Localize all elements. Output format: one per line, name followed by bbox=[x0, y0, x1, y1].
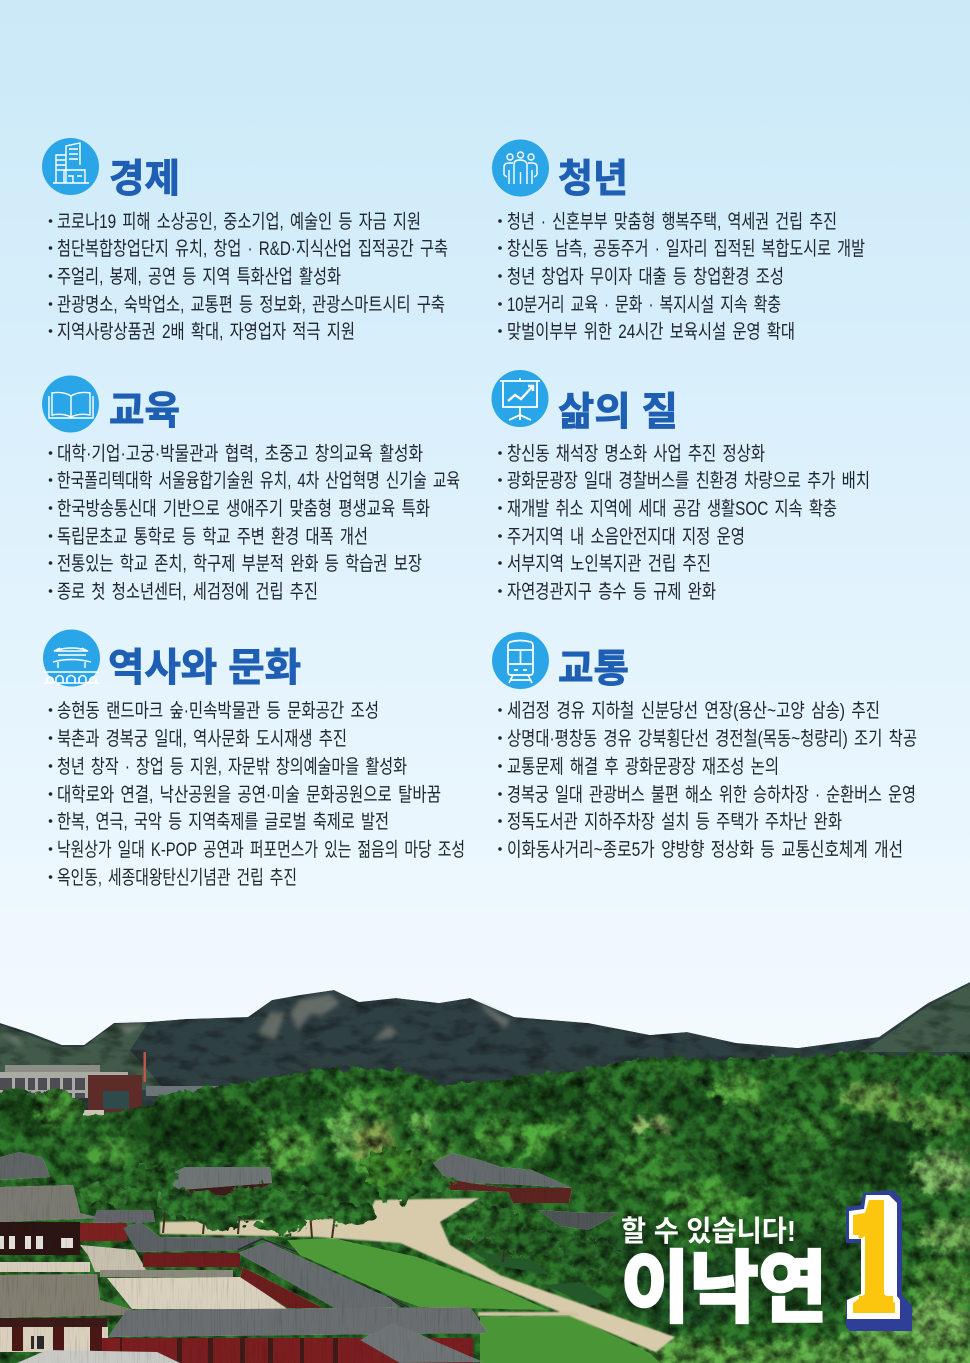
panel: 교육 bbox=[42, 376, 460, 603]
heading: 교육 bbox=[109, 390, 180, 433]
bullet list bbox=[49, 211, 448, 343]
candidate name: 이낙연 bbox=[621, 1244, 827, 1332]
lawn bbox=[287, 1238, 660, 1363]
bullet list: 청년 창작 · 창업 등 지원, 자문밖 창의예술마을 활성화 bbox=[57, 756, 407, 778]
bullet list: 10분거리 교육 · 문화 · 복지시설 지속 확충 bbox=[507, 294, 781, 316]
bullet list: 송현동 랜드마크 숲·민속박물관 등 문화공간 조성 bbox=[57, 700, 379, 722]
bullet list: 독립문초교 통학로 등 학교 주변 환경 대폭 개선 bbox=[57, 526, 368, 548]
bullet list bbox=[49, 700, 465, 889]
slogan: 할 수 있습니다! bbox=[621, 1215, 796, 1248]
front hall bbox=[0, 1327, 108, 1352]
bullet list: 대학로와 연결, 낙산공원을 공연·미술 문화공원으로 탈바꿈 bbox=[57, 784, 441, 806]
bullet list: 자연경관지구 층수 등 규제 완화 bbox=[507, 581, 716, 603]
palace buildings bbox=[0, 1152, 619, 1363]
bullet list: 창신동 채석장 명소화 사업 추진 정상화 bbox=[507, 443, 765, 465]
icon: city buildings bbox=[42, 138, 99, 195]
mountains bbox=[0, 982, 970, 1110]
bullet list: 재개발 취소 지역에 세대 공감 생활SOC 지속 확충 bbox=[507, 498, 837, 520]
bullet list: 광화문광장 일대 경찰버스를 친환경 차량으로 추가 배치 bbox=[507, 470, 870, 492]
bullet list: 지역사랑상품권 2배 확대, 자영업자 적극 지원 bbox=[57, 321, 355, 343]
bullet list: 교통문제 해결 후 광화문광장 재조성 논의 bbox=[507, 756, 779, 778]
terrace bbox=[80, 1245, 147, 1272]
bullet list: 한복, 연극, 국악 등 지역축제를 글로벌 축제로 발전 bbox=[57, 811, 389, 833]
heading: 역사와 문화 bbox=[108, 647, 301, 690]
icon: people bbox=[492, 140, 549, 196]
bullet list: 북촌과 경복궁 일대, 역사문화 도시재생 추진 bbox=[57, 728, 347, 750]
bullet list: 첨단복합창업단지 유치, 창업 · R&D·지식산업 집적공간 구축 bbox=[57, 238, 448, 260]
bullet list: 한국폴리텍대학 서울융합기술원 유치, 4차 산업혁명 신기술 교육 bbox=[57, 470, 460, 492]
bullet list: 한국방송통신대 기반으로 생애주기 맞춤형 평생교육 특화 bbox=[57, 498, 430, 520]
panel: 교통 bbox=[492, 632, 917, 861]
bullet list: 정독도서관 지하주차장 설치 등 주택가 주차난 완화 bbox=[507, 811, 842, 833]
heading: 경제 bbox=[109, 158, 180, 201]
bullet list: 주얼리, 봉제, 공연 등 지역 특화산업 활성화 bbox=[57, 266, 341, 288]
bullet list: 옥인동, 세종대왕탄신기념관 건립 추진 bbox=[57, 867, 297, 889]
icon: open book bbox=[42, 376, 99, 432]
bullet list: 맞벌이부부 위한 24시간 보육시설 운영 확대 bbox=[507, 321, 795, 343]
badge: number 1 bbox=[846, 1173, 912, 1363]
bullet list: 대학·기업·고궁·박물관과 협력, 초중고 창의교육 활성화 bbox=[57, 443, 423, 465]
bullet list: 코로나19 피해 소상공인, 중소기업, 예술인 등 자금 지원 bbox=[57, 211, 421, 233]
bullet list bbox=[49, 443, 460, 603]
sand paths bbox=[160, 1198, 675, 1352]
bullet list: 청년 창업자 무이자 대출 등 창업환경 조성 bbox=[507, 266, 784, 288]
badge: number 1: 1 bbox=[854, 1173, 896, 1363]
icon: train bbox=[492, 632, 549, 689]
bullet list: 세검정 경유 지하철 신분당선 연장(용산~고양 삼송) 추진 bbox=[507, 700, 880, 722]
bullet list: 종로 첫 청소년센터, 세검정에 건립 추진 bbox=[57, 581, 318, 603]
bullet list bbox=[498, 700, 917, 861]
bullet list: 낙원상가 일대 K-POP 공연과 퍼포먼스가 있는 젊음의 마당 조성 bbox=[57, 839, 465, 861]
bullet list bbox=[498, 443, 870, 603]
mountain rock faces bbox=[0, 994, 510, 1050]
icon: palace gate bbox=[43, 630, 100, 686]
icon: presentation board bbox=[492, 370, 548, 427]
main hall bbox=[0, 1222, 80, 1255]
panel: 경제 bbox=[42, 138, 448, 343]
background city building bbox=[0, 1052, 236, 1120]
bullet list: 청년 · 신혼부부 맞춤형 행복주택, 역세권 건립 추진 bbox=[507, 211, 837, 233]
bullet list: 서부지역 노인복지관 건립 추진 bbox=[507, 553, 711, 575]
bullet list: 전통있는 학교 존치, 학구제 부분적 완화 등 학습권 보장 bbox=[57, 553, 422, 575]
bullet list bbox=[498, 211, 865, 343]
bullet list: 관광명소, 숙박업소, 교통편 등 정보화, 관광스마트시티 구축 bbox=[57, 294, 445, 316]
forest bbox=[0, 1052, 970, 1363]
bullet list: 창신동 남측, 공동주거 · 일자리 집적된 복합도시로 개발 bbox=[507, 238, 865, 260]
heading: 교통 bbox=[558, 648, 629, 691]
panel: 삶의 질 bbox=[492, 370, 870, 603]
panel: 청년 bbox=[492, 140, 865, 343]
pine trunks bbox=[163, 1208, 505, 1262]
pine trees in courtyard bbox=[79, 1148, 618, 1271]
heading: 청년 bbox=[558, 158, 628, 201]
mid wing bbox=[143, 1253, 240, 1267]
photo: Changdeokgung palace with Bukhansan mountains bbox=[0, 982, 970, 1363]
bullet list: 주거지역 내 소음안전지대 지정 운영 bbox=[507, 526, 745, 548]
panel: 역사와 문화 bbox=[43, 630, 465, 889]
back roofs bbox=[163, 1167, 272, 1190]
heading: 삶의 질 bbox=[558, 391, 678, 434]
